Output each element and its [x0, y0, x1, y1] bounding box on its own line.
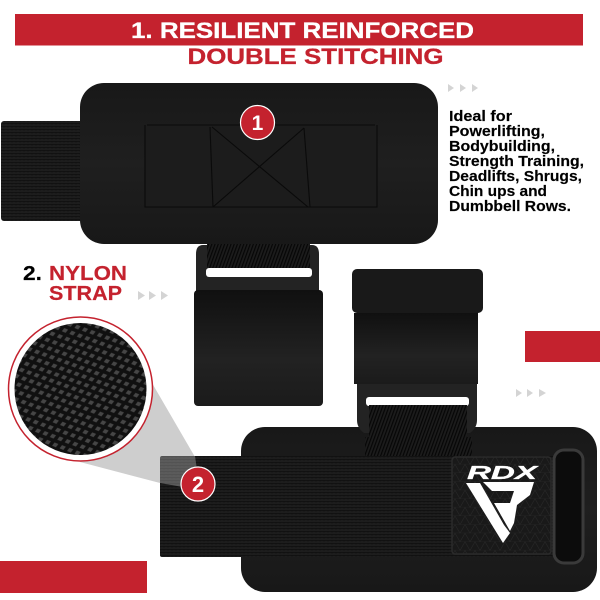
arrows: strap label	[138, 291, 168, 300]
usage text block: Powerlifting,	[449, 124, 545, 140]
label: nylon strap	[23, 262, 127, 305]
badge 1: 1	[252, 112, 264, 135]
label: nylon strap: STRAP	[49, 282, 122, 305]
badge 1	[240, 106, 274, 140]
product: hook with buckle, right	[352, 269, 483, 456]
label: nylon strap: NYLON	[49, 262, 127, 285]
subtitle: DOUBLE STITCHING	[188, 44, 444, 69]
label: nylon strap: 2.	[23, 262, 42, 285]
red accent block right	[525, 331, 600, 362]
badge 2	[181, 467, 215, 501]
metal ring	[554, 450, 583, 563]
usage text block	[449, 109, 584, 215]
usage text block: Bodybuilding,	[449, 139, 555, 155]
zoom cone	[80, 383, 195, 483]
product: lower wrist pad with strap	[160, 427, 597, 592]
title banner	[15, 14, 583, 46]
logo patch: RDX	[467, 463, 539, 483]
usage text block: Chin ups and	[449, 184, 547, 200]
usage text block: Dumbbell Rows.	[449, 199, 571, 215]
product: hook with buckle, left	[194, 244, 323, 406]
badge 2: 2	[192, 472, 204, 497]
arrows: top right	[448, 84, 478, 92]
title banner: 1. RESILIENT REINFORCED	[131, 18, 474, 43]
zoom lens: nylon weave detail	[8, 317, 152, 461]
logo patch	[452, 457, 551, 554]
usage text block: Deadlifts, Shrugs,	[449, 169, 582, 185]
usage text block: Strength Training,	[449, 154, 584, 170]
red accent block bottom left	[0, 561, 147, 593]
usage text block: Ideal for	[449, 109, 512, 125]
product: top wrist pad with strap	[1, 83, 438, 244]
arrows: lower right	[516, 389, 546, 397]
